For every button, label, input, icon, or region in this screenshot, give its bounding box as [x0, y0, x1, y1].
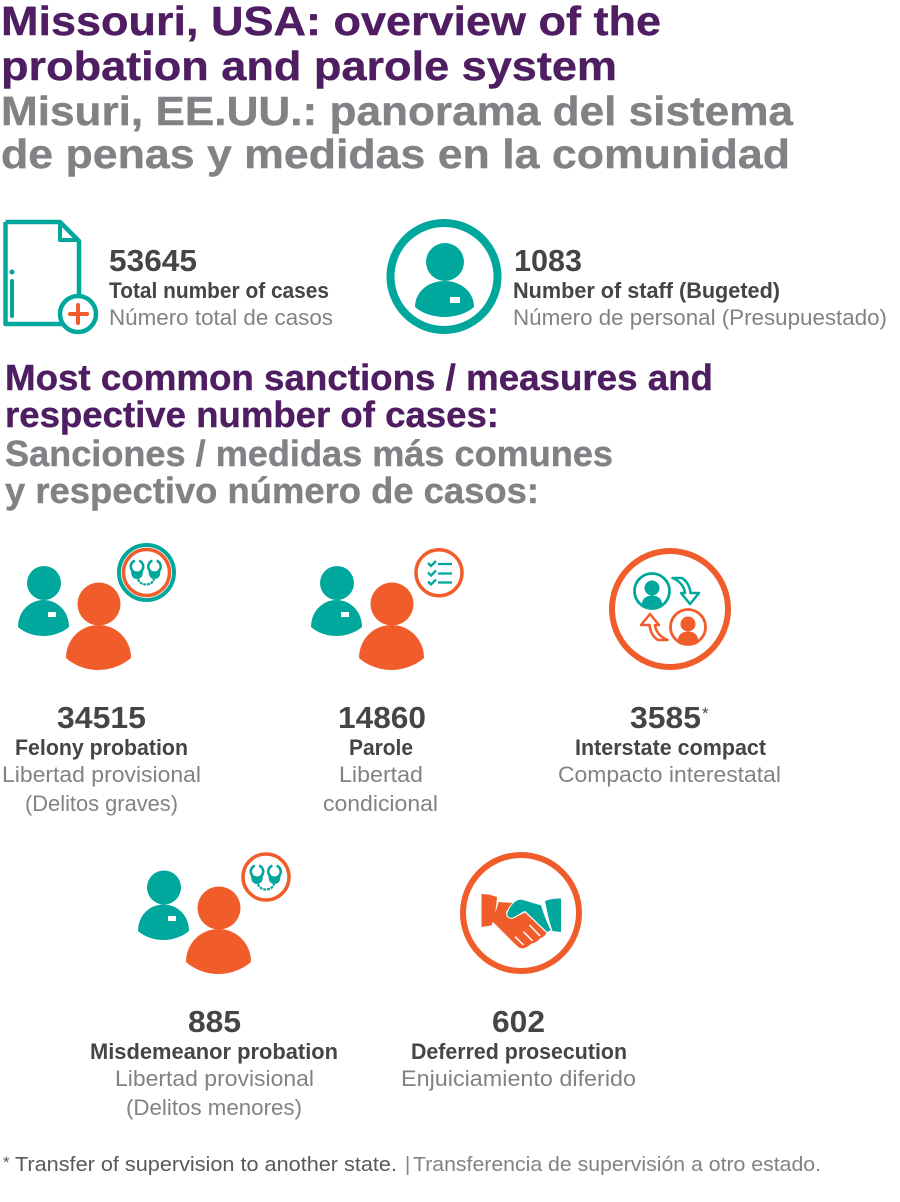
title: probation and parole system: [1, 43, 617, 89]
stat: parole: 14860: [338, 700, 426, 735]
footnote: Transferencia de supervisión a otro estado.: [413, 1154, 821, 1176]
icon: staff member: [390, 223, 498, 330]
stat: parole: Parole: [349, 735, 413, 760]
section heading: Most common sanctions / measures and: [5, 357, 713, 398]
icon: felony probation people: [18, 566, 131, 670]
section heading: y respectivo número de casos:: [5, 470, 539, 511]
stat: deferred prosecution: Enjuiciamiento diferido: [401, 1066, 636, 1091]
stat: number of staff: Number of staff (Bugeted): [513, 278, 780, 303]
stat: parole: condicional: [323, 791, 438, 816]
footnote: *: [3, 1153, 10, 1172]
icon: document with plus: [6, 222, 96, 332]
stat: number of staff: 1083: [514, 243, 582, 278]
section heading: respective number of cases:: [5, 394, 499, 435]
stat: total number of cases: Número total de casos: [109, 305, 333, 330]
stat: interstate compact: Interstate compact: [575, 735, 767, 760]
stat: misdemeanor probation: [90, 1004, 338, 1120]
stat: felony probation: Felony probation: [15, 735, 188, 760]
stat: deferred prosecution: [401, 1004, 636, 1091]
stat: misdemeanor probation: 885: [188, 1004, 241, 1039]
title: Misuri, EE.UU.: panorama del sistema: [1, 88, 794, 134]
icon: interstate compact: [612, 551, 728, 667]
stat: number of staff: Número de personal (Presupuestado): [513, 305, 887, 330]
stat: interstate compact: [558, 700, 781, 787]
stat: deferred prosecution: 602: [492, 1004, 545, 1039]
icon: handcuffs single ring: [243, 854, 289, 900]
icon: parole people: [311, 566, 424, 670]
icon: handcuffs double ring: [119, 545, 174, 600]
title: [1, 0, 794, 177]
stat: total number of cases: 53645: [109, 243, 197, 278]
stat: felony probation: [2, 700, 201, 816]
stat: misdemeanor probation: (Delitos menores): [126, 1095, 302, 1120]
stat: deferred prosecution: Deferred prosecution: [411, 1039, 627, 1064]
stat: felony probation: (Delitos graves): [25, 791, 178, 816]
stat: parole: Libertad: [339, 762, 423, 787]
stat: misdemeanor probation: Libertad provisional: [115, 1066, 314, 1091]
footnote: |: [405, 1154, 410, 1176]
section heading: [5, 357, 713, 511]
stat: felony probation: 34515: [57, 700, 146, 735]
footnote: [3, 1153, 821, 1176]
stat: parole: [323, 700, 438, 816]
icon: checklist: [416, 550, 462, 596]
stat: felony probation: Libertad provisional: [2, 762, 201, 787]
stat: total number of cases: [109, 243, 333, 330]
icon: misdemeanor probation people: [138, 870, 251, 974]
stat: interstate compact: *: [702, 704, 709, 723]
icon: handshake: [463, 855, 579, 971]
title: de penas y medidas en la comunidad: [1, 131, 790, 177]
stat: number of staff: [513, 243, 887, 330]
footnote: Transfer of supervision to another state.: [15, 1154, 397, 1176]
section heading: Sanciones / medidas más comunes: [5, 433, 613, 474]
stat: total number of cases: Total number of cases: [109, 278, 329, 303]
stat: interstate compact: Compacto interestatal: [558, 762, 781, 787]
stat: interstate compact: 3585: [630, 700, 701, 735]
stat: misdemeanor probation: Misdemeanor probation: [90, 1039, 338, 1064]
